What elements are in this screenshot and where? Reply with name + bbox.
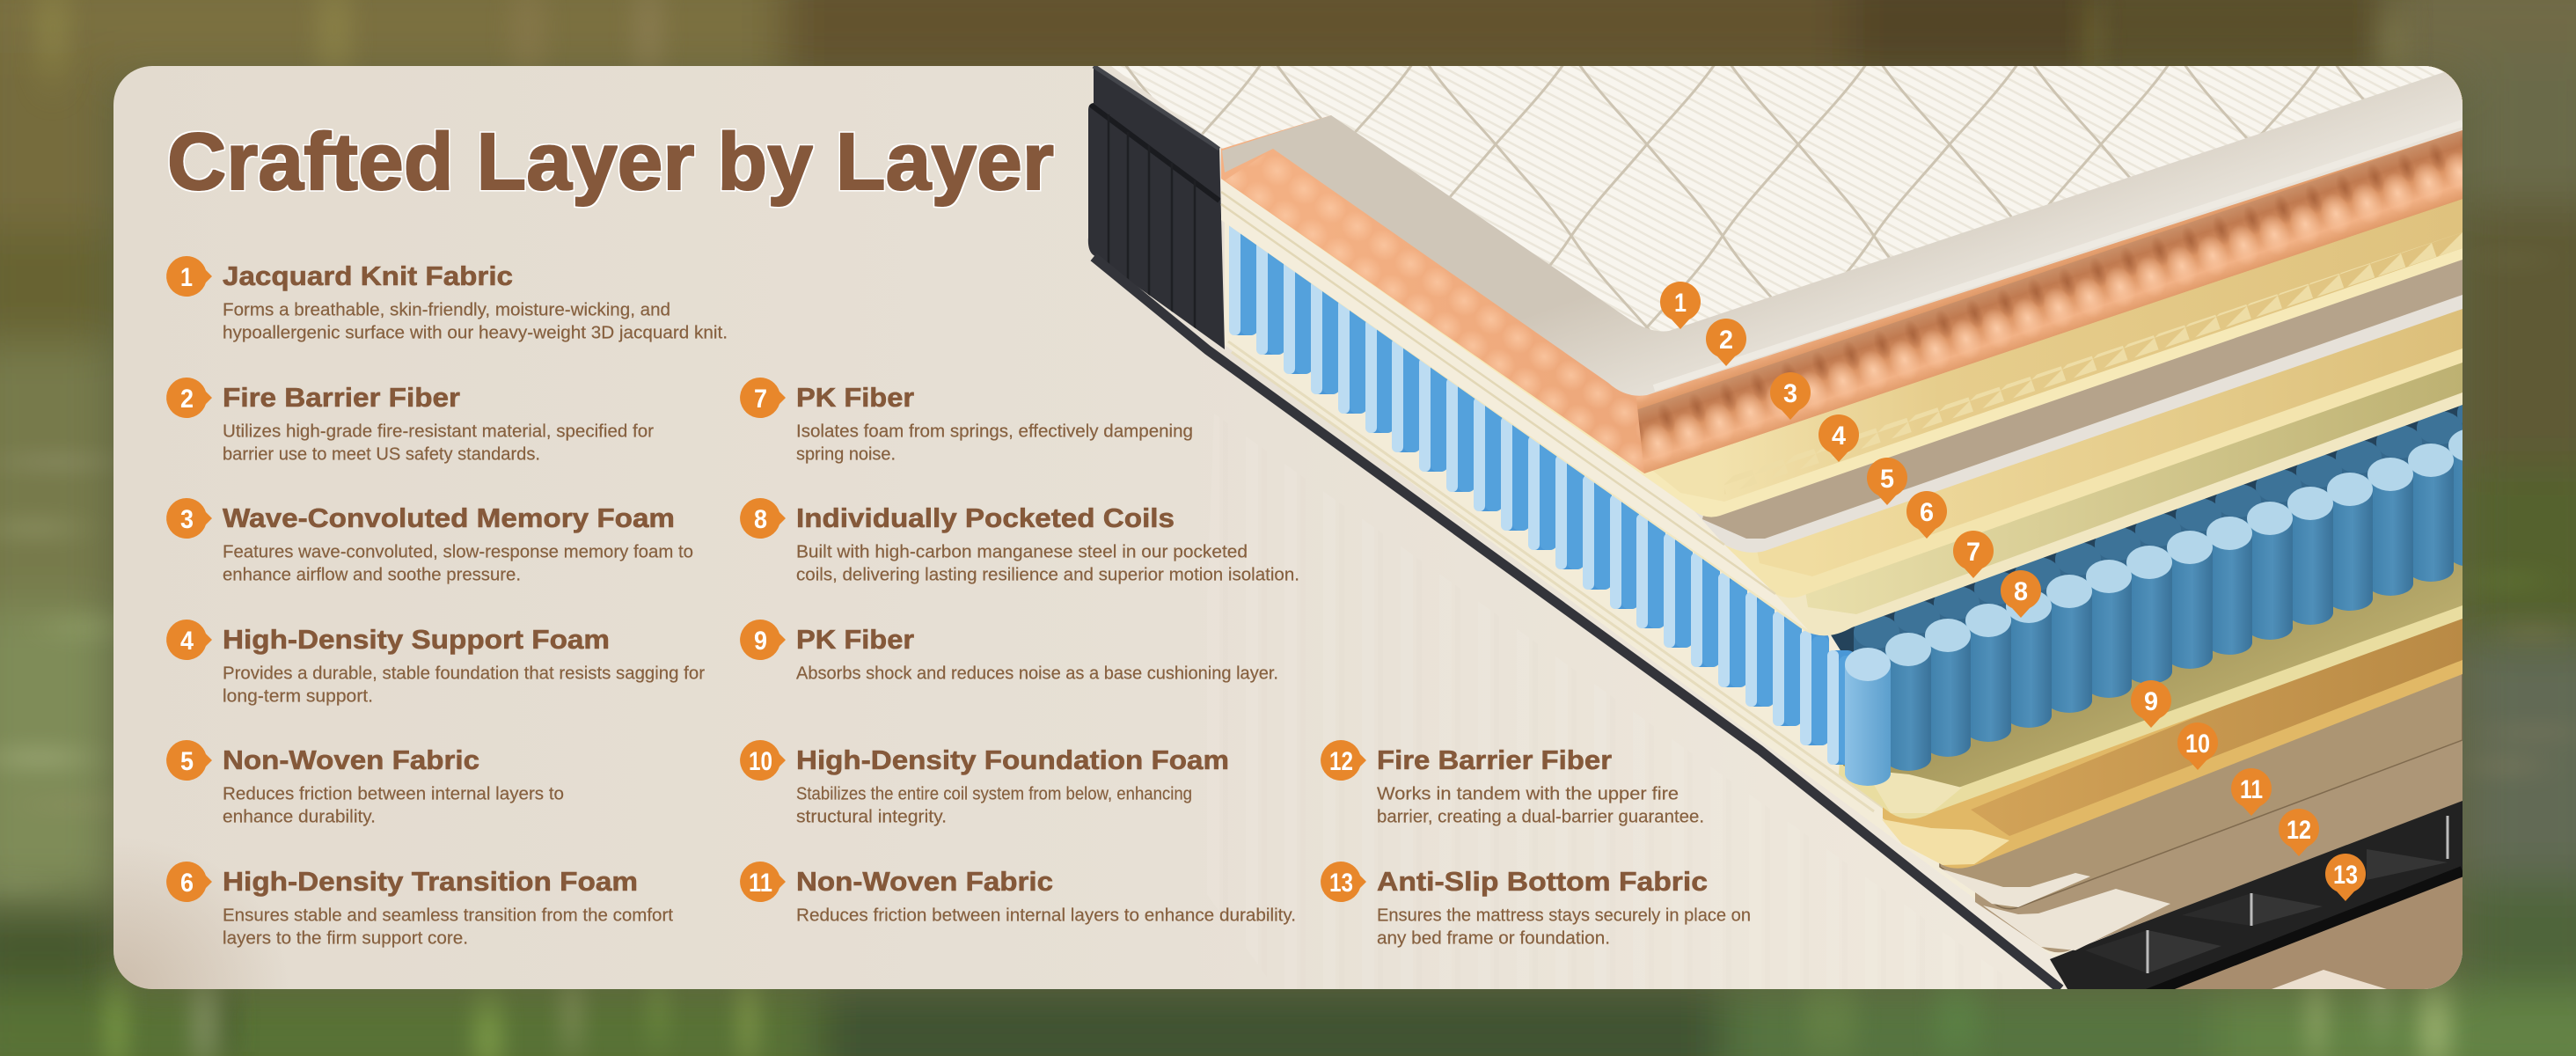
heading: High-Density Foundation Foam [796, 744, 1229, 775]
description: barrier, creating a dual-barrier guarantee. [1377, 806, 1704, 827]
item 3: Wave-Convoluted Memory Foam [166, 498, 693, 584]
layer marker pins [1660, 282, 2366, 901]
item 10: High-Density Foundation Foam [740, 740, 1229, 827]
badge 2 [166, 378, 212, 418]
badge 8 [740, 498, 786, 539]
layer 6: transition foam [1221, 66, 2463, 598]
badge 7 [740, 378, 786, 418]
description: Isolates foam from springs, effectively dampening [796, 421, 1193, 442]
badge 1 [166, 256, 212, 297]
description: Reduces friction between internal layers to [223, 783, 564, 804]
pin 11: 11 [2240, 775, 2263, 804]
pin 3: 3 [1783, 379, 1797, 408]
description: enhance durability. [223, 806, 376, 827]
pin 7: 7 [1966, 538, 1980, 567]
pin 5 [1867, 458, 1907, 505]
pin 10 [2177, 722, 2218, 770]
description: enhance airflow and soothe pressure. [223, 565, 521, 584]
pin 12 [2279, 809, 2319, 856]
description: Absorbs shock and reduces noise as a base cushioning layer. [796, 664, 1278, 683]
badge 2: 2 [180, 385, 194, 414]
description: Works in tandem with the upper fire [1377, 783, 1679, 804]
layer 13: anti-slip bottom [2050, 796, 2463, 994]
description: any bed frame or foundation. [1377, 928, 1610, 949]
pin 3 [1770, 372, 1811, 420]
pin 9: 9 [2144, 687, 2158, 716]
item 4: High-Density Support Foam [166, 620, 705, 706]
badge 4 [166, 620, 212, 660]
layer 10: foundation foam [1882, 619, 2463, 869]
title: Crafted Layer by Layer [167, 117, 1054, 207]
badge 3 [166, 498, 212, 539]
description: coils, delivering lasting resilience and superior motion isolation. [796, 565, 1299, 584]
description: Ensures stable and seamless transition from the comfort [223, 905, 673, 926]
description: Forms a breathable, skin-friendly, moisture-wicking, and [223, 299, 670, 320]
description: Built with high-carbon manganese steel in our pocketed [796, 542, 1248, 561]
description: structural integrity. [796, 806, 947, 827]
item 11: Non-Woven Fabric [740, 862, 1296, 926]
badge 6: 6 [180, 869, 194, 898]
badge 12 [1321, 740, 1366, 781]
pin 8 [2001, 570, 2041, 618]
badge 10 [740, 740, 786, 781]
pin 8: 8 [2014, 577, 2028, 606]
badge 1: 1 [180, 263, 193, 292]
badge 7: 7 [754, 385, 767, 414]
item 7: PK Fiber [740, 378, 1193, 465]
description: Utilizes high-grade fire-resistant material, specified for [223, 421, 654, 442]
badge 6 [166, 862, 212, 902]
heading: Jacquard Knit Fabric [223, 260, 513, 291]
layer 7: PK fiber [1221, 66, 2463, 635]
badge 8: 8 [754, 505, 767, 534]
description: barrier use to meet US safety standards. [223, 444, 540, 465]
heading: Non-Woven Fabric [796, 866, 1053, 897]
item 5: Non-Woven Fabric [166, 740, 564, 827]
badge 12: 12 [1329, 747, 1353, 776]
heading: Fire Barrier Fiber [1377, 744, 1612, 775]
heading: High-Density Support Foam [223, 624, 610, 655]
description: Ensures the mattress stays securely in place on [1377, 905, 1751, 926]
item 8: Individually Pocketed Coils [740, 498, 1299, 584]
pin 13 [2325, 854, 2366, 901]
heading: Individually Pocketed Coils [796, 502, 1175, 533]
item 2: Fire Barrier Fiber [166, 378, 654, 465]
badge 11: 11 [749, 869, 772, 898]
badge 13 [1321, 862, 1366, 902]
badge 9 [740, 620, 786, 660]
pin 12: 12 [2287, 816, 2311, 845]
badge 5: 5 [180, 747, 194, 776]
heading: Wave-Convoluted Memory Foam [223, 502, 675, 533]
heading: PK Fiber [796, 624, 914, 655]
badge 13: 13 [1329, 869, 1353, 898]
description: Provides a durable, stable foundation that resists sagging for [223, 664, 705, 683]
pin 4: 4 [1832, 422, 1846, 451]
description: long-term support. [223, 686, 373, 706]
pin 1 [1660, 282, 1701, 329]
heading: PK Fiber [796, 382, 914, 413]
layer 4: high-density support foam [1221, 66, 2463, 517]
pin 7 [1953, 531, 1994, 578]
layer 9: PK fiber [1839, 405, 2463, 818]
description: layers to the firm support core. [223, 928, 468, 949]
badge 10: 10 [749, 747, 772, 776]
description: Features wave-convoluted, slow-response memory foam to [223, 542, 693, 561]
badge 5 [166, 740, 212, 781]
pin 11 [2231, 768, 2272, 816]
pin 5: 5 [1880, 465, 1894, 494]
pin 6: 6 [1920, 498, 1934, 527]
heading: Non-Woven Fabric [223, 744, 479, 775]
badge 9: 9 [754, 627, 767, 656]
layer 3: wave-convoluted memory foam [1221, 66, 2463, 473]
heading: High-Density Transition Foam [223, 866, 638, 897]
item 12: Fire Barrier Fiber [1321, 740, 1704, 827]
pin 4 [1819, 414, 1859, 462]
badge 3: 3 [180, 505, 194, 534]
item 1: Jacquard Knit Fabric [166, 256, 728, 343]
base piping edge [1094, 257, 2060, 989]
layer 1: jacquard knit fabric [1111, 66, 2463, 331]
layer 11: non-woven fabric [1939, 674, 2463, 910]
badge 4: 4 [180, 627, 194, 656]
cream foam border [1225, 223, 1883, 813]
description: Stabilizes the entire coil system from below, enhancing [796, 783, 1192, 804]
heading: Anti-Slip Bottom Fabric [1377, 866, 1708, 897]
mattress side panel [1088, 66, 1225, 349]
layer 5: non-woven fabric [1221, 66, 2463, 553]
mattress cutaway illustration [1088, 66, 2503, 994]
item 6: High-Density Transition Foam [166, 862, 673, 949]
pin 2: 2 [1719, 326, 1733, 355]
pin 6 [1906, 491, 1947, 539]
pin 2 [1706, 319, 1746, 366]
description: Reduces friction between internal layers to enhance durability. [796, 905, 1296, 926]
item 13: Anti-Slip Bottom Fabric [1321, 862, 1751, 949]
pin 1: 1 [1674, 289, 1687, 318]
pin 9 [2131, 680, 2171, 728]
layer 12: fire barrier fiber [1975, 741, 2463, 952]
pin 13: 13 [2333, 861, 2358, 890]
description: hypoallergenic surface with our heavy-weight 3D jacquard knit. [223, 322, 728, 343]
heading: Fire Barrier Fiber [223, 382, 460, 413]
cream foam edges, left arm [1221, 179, 1808, 630]
badge 11 [740, 862, 786, 902]
description: spring noise. [796, 444, 896, 465]
item 9: PK Fiber [740, 620, 1278, 683]
layer 2: fire barrier fiber [1222, 66, 2463, 396]
layer 8: pocketed coils, left arm [1229, 221, 1891, 786]
layer 8: pocketed coils, right arm [1830, 396, 2503, 771]
pin 10: 10 [2185, 730, 2210, 759]
